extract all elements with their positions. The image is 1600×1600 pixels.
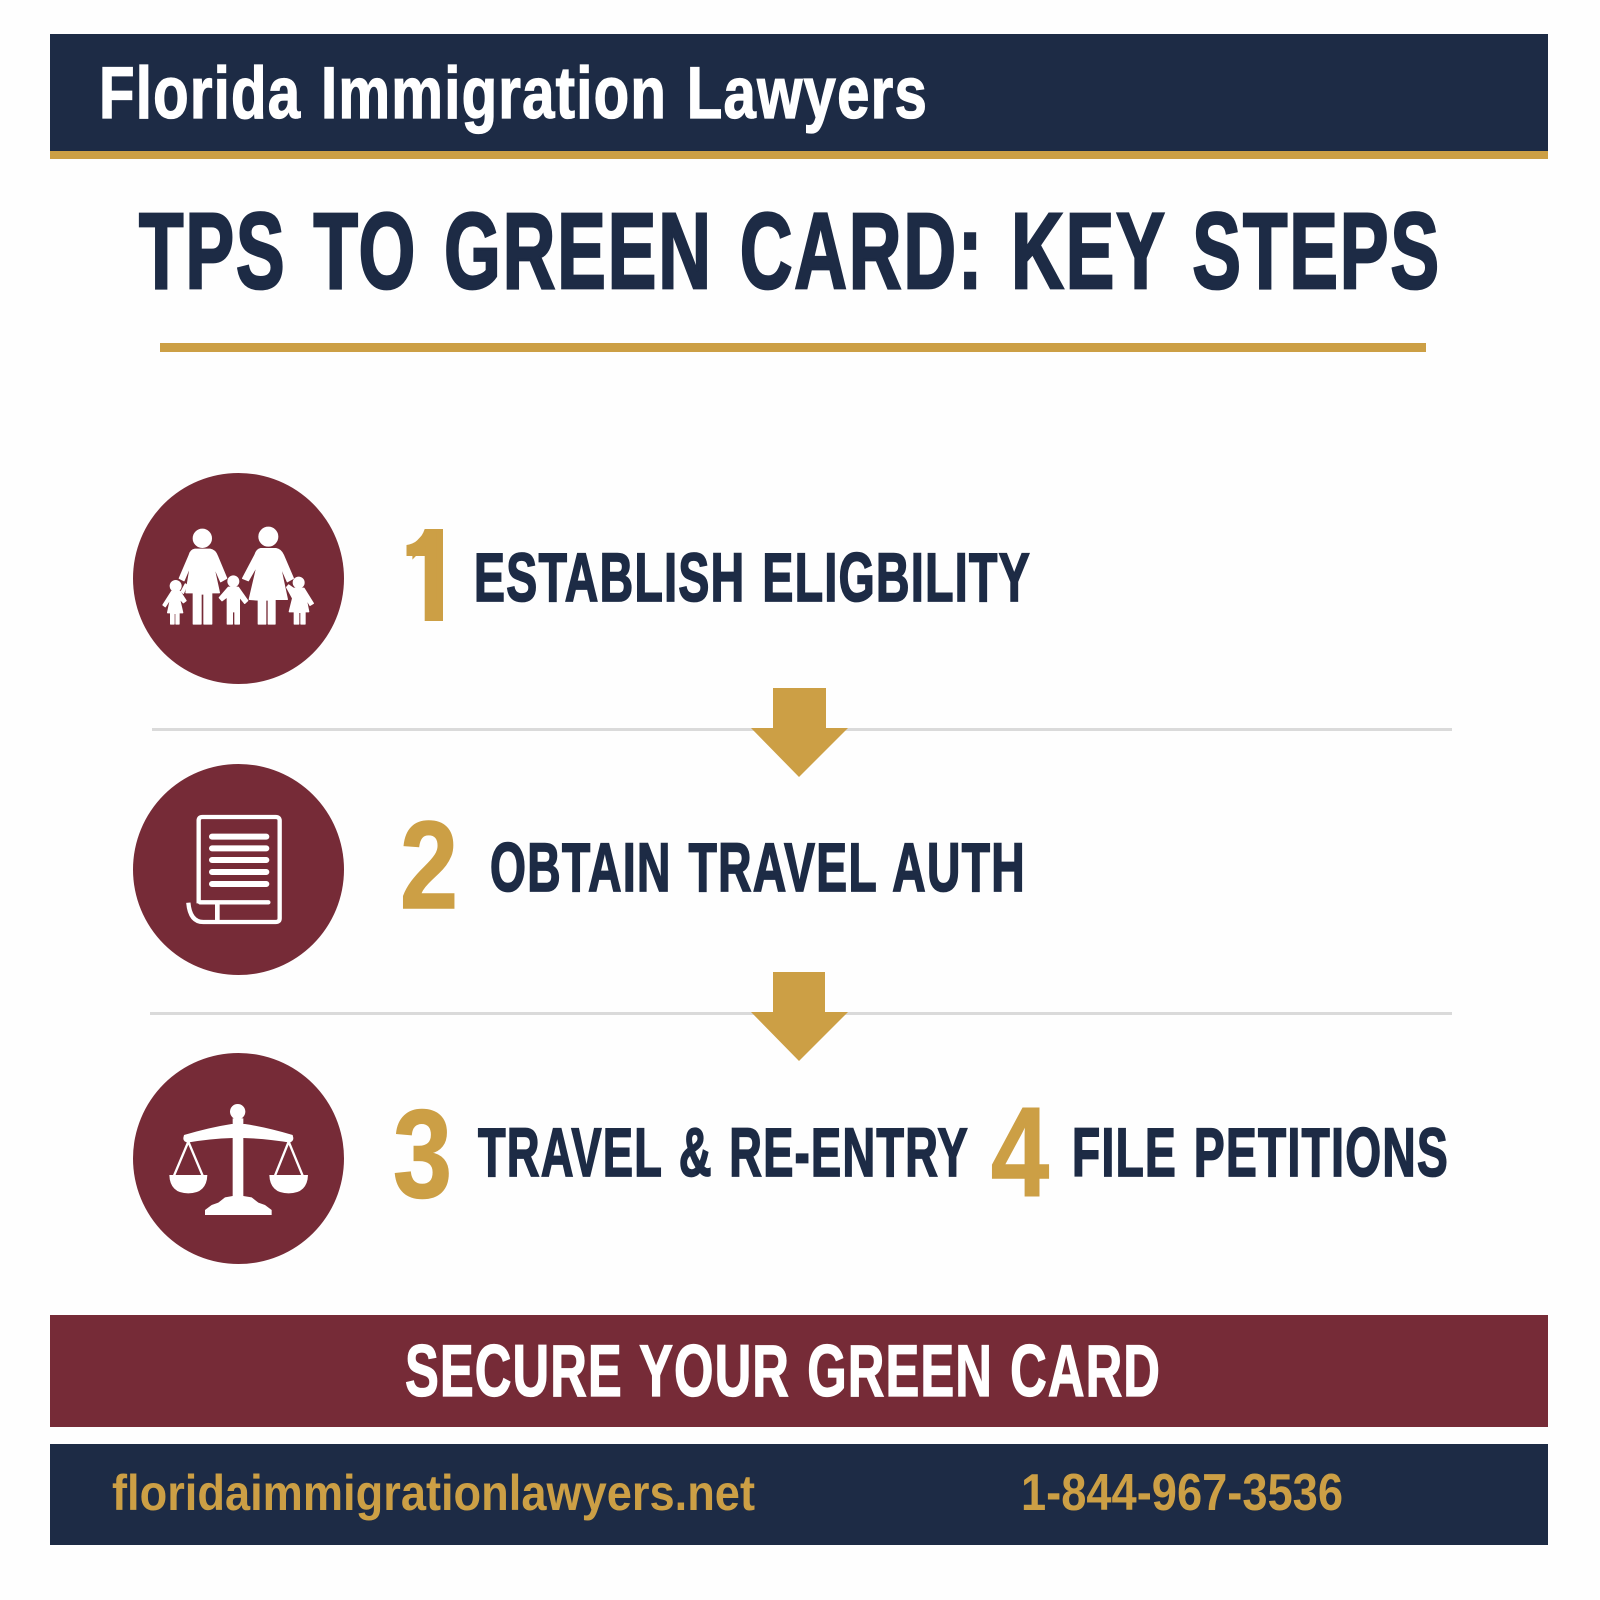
footer band (50, 1444, 1548, 1545)
call to action text: SECURE YOUR GREEN CARD (405, 1331, 1161, 1412)
step 2 icon: document in maroon circle (133, 764, 344, 975)
step 4 number: 4 (991, 1081, 1049, 1223)
header band (50, 34, 1548, 159)
step 3 icon: scales of justice in maroon circle (133, 1053, 344, 1264)
arrow 2 (751, 972, 848, 1061)
step 3 label: TRAVEL & RE-ENTRY (478, 1114, 969, 1191)
header brand name: Florida Immigration Lawyers (99, 53, 928, 134)
step 3 number: 3 (393, 1085, 452, 1224)
step 2 number: 2 (400, 797, 458, 935)
call to action band (50, 1315, 1548, 1427)
dividers (150, 728, 1452, 1015)
step 1 number (406, 529, 443, 621)
title underline (160, 343, 1426, 352)
arrow 1 (751, 688, 848, 777)
step 1 icon: family in maroon circle (133, 473, 344, 684)
phone number: 1-844-967-3536 (1021, 1464, 1343, 1522)
website: floridaimmigrationlawyers.net (112, 1465, 755, 1521)
step 1 label: ESTABLISH ELIGBILITY (474, 539, 1031, 616)
step 1 number: 1 (407, 502, 451, 649)
step 2 label: OBTAIN TRAVEL AUTH (490, 829, 1026, 906)
